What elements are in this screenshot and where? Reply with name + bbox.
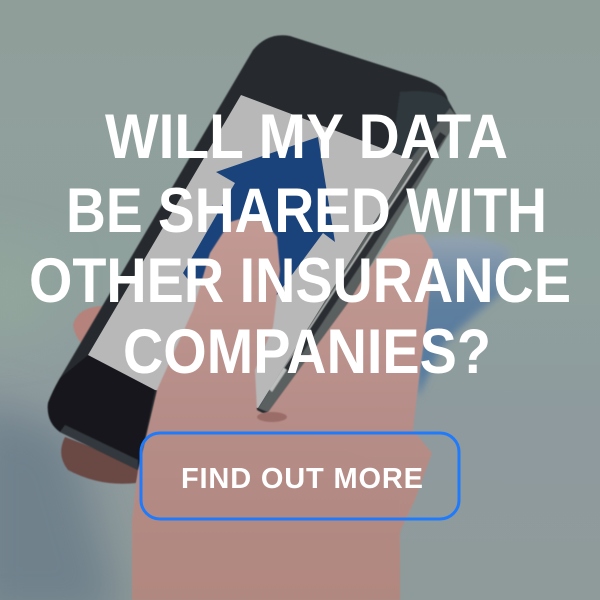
knuckle shadow [257,412,287,422]
sleeve [417,236,510,398]
headline: COMPANIES? [123,317,491,387]
headline: WILL MY DATA [105,102,508,172]
hand and thumb [132,217,400,600]
headline [29,102,571,387]
button: find out more: FIND OUT MORE [181,463,423,495]
headline: BE SHARED WITH [66,176,547,246]
phone screen [88,95,413,408]
phone body [48,35,458,470]
upload arrow on screen [183,137,335,300]
hand back fingers [61,306,140,484]
hand behind phone [250,234,433,600]
button: find out more [141,433,459,519]
